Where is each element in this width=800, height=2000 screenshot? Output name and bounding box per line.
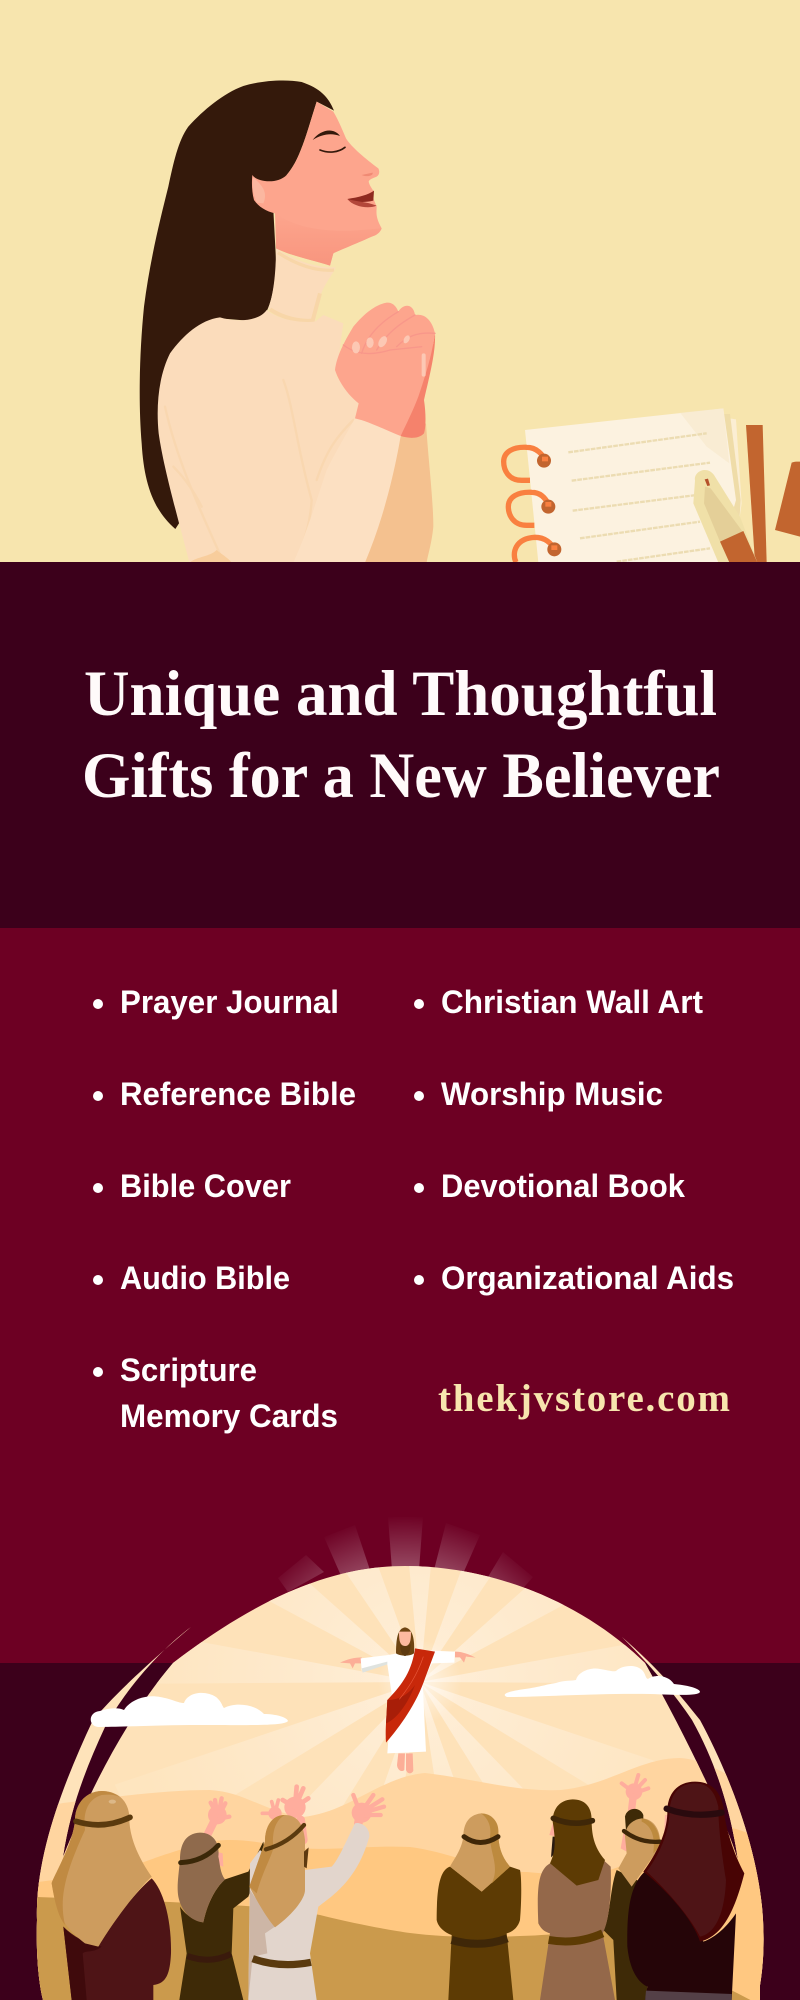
sun rays: [156, 1566, 708, 1817]
person 6: headband: [624, 1831, 660, 1842]
person 5: robe: [538, 1860, 615, 2000]
list item: Scripture Memory Cards: Memory Cards: [120, 1398, 338, 1434]
woman: nose shade: [362, 173, 373, 176]
person 2: robe: [179, 1842, 265, 2000]
object at right edge: [775, 462, 800, 537]
hills and ground: [0, 1758, 800, 2000]
Jesus: feet: [397, 1753, 413, 1773]
list item: Bible Cover: Bible Cover: [120, 1168, 291, 1204]
person 1: hood: [52, 1791, 152, 1947]
person 4: headband: [464, 1837, 498, 1842]
cloud right: [505, 1666, 700, 1697]
Jesus: hands: [340, 1652, 476, 1668]
person 6: raised hand: [622, 1775, 648, 1809]
title: [82, 658, 720, 812]
panel: title band: [0, 562, 800, 928]
pen: [693, 470, 757, 562]
list item: Organizational Aids: Organizational Aids: [441, 1260, 734, 1296]
person 1: robe: [63, 1878, 171, 2000]
outer crescents: [37, 1627, 764, 2000]
person 7: headband: [667, 1809, 722, 1815]
list item: Scripture Memory Cards: [93, 1352, 338, 1434]
list item: Devotional Book: Devotional Book: [441, 1168, 685, 1204]
woman: back arm: [365, 423, 433, 562]
person 3: hood: [249, 1815, 305, 1927]
person 6: sleeve: [625, 1809, 643, 1840]
person 3: robe: [248, 1823, 369, 2000]
woman: front hand: [335, 303, 435, 436]
ruler: [746, 425, 767, 562]
panel: gift list band: [0, 928, 800, 1663]
list item: Christian Wall Art: Christian Wall Art: [441, 984, 703, 1020]
person 5: hood: [550, 1799, 605, 1886]
far hills: [0, 1758, 800, 2000]
illustration: ascension scene: [36, 1521, 764, 2000]
woman: forearm sleeve: [293, 418, 401, 562]
dome sky: [45, 1566, 760, 2000]
woman: hair: [140, 81, 334, 529]
raised hands: [207, 1787, 384, 1840]
notebook: ring holes: [537, 454, 561, 556]
cloud left: [91, 1693, 288, 1727]
person 1: headband: [76, 1817, 130, 1825]
Jesus: beard: [400, 1644, 411, 1656]
gift list: left column: [93, 984, 356, 1434]
crowd: left group: [52, 1787, 384, 2000]
illustration: praying woman: [140, 81, 435, 562]
middle hills: [36, 1828, 764, 2000]
woman: face: [252, 102, 382, 266]
person 4: hood: [450, 1813, 510, 1892]
panel: lower dark band: [0, 1663, 800, 2000]
Jesus: hair: [396, 1627, 414, 1656]
person 3: belt: [253, 1959, 311, 1965]
person 6: robe: [603, 1870, 650, 2000]
person 7: hood: [643, 1782, 744, 1942]
person 2: beard and face: [217, 1852, 223, 1867]
figure: Jesus ascending: [340, 1627, 476, 1773]
woman: lips: [347, 191, 374, 202]
person 7: skirt trim: [645, 1991, 732, 2000]
illustration: notebook and pen: [504, 408, 800, 562]
title: Unique and Thoughtful: [84, 658, 717, 730]
website url: thekjvstore.com: [438, 1377, 730, 1420]
notebook: paper: [525, 408, 736, 562]
person 7: robe: [627, 1870, 736, 2000]
light rays above the dome: [278, 1517, 533, 1594]
person 3: beard: [304, 1847, 309, 1868]
woman: eye: [320, 147, 345, 152]
list item: Audio Bible: Audio Bible: [120, 1260, 290, 1296]
person 2: belt: [187, 1954, 231, 1960]
list item: Scripture Memory Cards: Scripture: [120, 1352, 257, 1388]
person 4: belt: [452, 1938, 507, 1944]
gift list: right column: [414, 984, 734, 1296]
person 2: headband: [181, 1845, 218, 1863]
ground: [20, 1896, 760, 2000]
list item: Reference Bible: Reference Bible: [120, 1076, 356, 1112]
person 6: face: [621, 1833, 628, 1852]
person 5: belt: [549, 1933, 603, 1941]
woman: turtleneck: [268, 248, 336, 322]
notebook: spiral rings: [504, 447, 554, 562]
Jesus: face: [399, 1632, 411, 1647]
person 2: hood: [178, 1833, 225, 1922]
woman: back hand: [401, 333, 435, 438]
person 4: robe: [437, 1867, 521, 2000]
person 5: headband: [553, 1818, 592, 1823]
list item: Prayer Journal: Prayer Journal: [120, 984, 339, 1020]
Jesus: sash: [386, 1648, 435, 1743]
person 6: hood: [618, 1818, 660, 1887]
woman: sweater body: [158, 310, 377, 562]
woman: ear: [253, 177, 265, 203]
woman: neck shadow: [276, 213, 382, 266]
notebook: back pages: [713, 418, 742, 562]
woman: brow: [313, 130, 340, 140]
crowd: right group: [437, 1775, 744, 2000]
panel: top illustration background: [0, 0, 800, 562]
person 1: ear: [127, 1830, 132, 1848]
woman: sweater folds: [165, 380, 355, 562]
person 3: headband: [266, 1825, 304, 1849]
person 7: ear: [664, 1815, 669, 1840]
title: Gifts for a New Believer: [82, 740, 720, 812]
person 5: face and beard: [549, 1822, 557, 1837]
woman: hand fingers: [343, 312, 435, 354]
notebook: writing lines: [568, 433, 710, 562]
Jesus: robe: [361, 1650, 455, 1753]
list item: Worship Music: Worship Music: [441, 1076, 663, 1112]
